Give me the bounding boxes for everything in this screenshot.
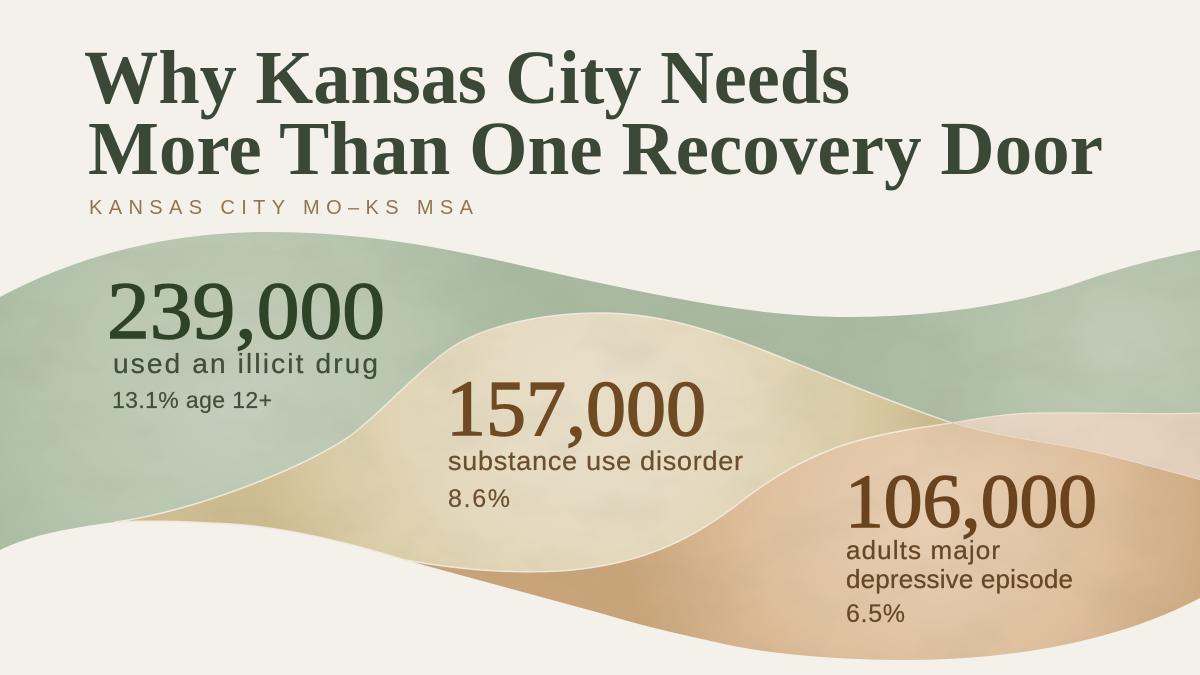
band: substance use disorder (beige) <box>115 313 952 572</box>
label: adults major <box>846 535 1000 565</box>
band: depressive episode (tan) <box>405 423 1200 660</box>
label: used an illicit drug <box>113 348 378 379</box>
watercolor texture <box>625 353 956 426</box>
percentage: 8.6% <box>448 485 510 513</box>
title: More Than One Recovery Door <box>88 107 1103 191</box>
stat: 106,000 <box>845 460 1097 628</box>
band: pale overlap on right <box>952 413 1200 481</box>
title: Why Kansas City Needs <box>84 36 850 120</box>
percentage: 13.1% age 12+ <box>112 387 272 413</box>
label: substance use disorder <box>448 446 743 476</box>
number: 239,000 <box>107 265 385 356</box>
stat: 239,000 <box>107 265 385 413</box>
band: illicit drug use (green) <box>0 232 1200 550</box>
stat: 157,000 <box>446 366 743 513</box>
number: 157,000 <box>446 366 706 453</box>
label <box>846 535 1073 594</box>
title <box>84 36 1103 191</box>
subtitle: KANSAS CITY MO–KS MSA <box>89 197 474 219</box>
number: 106,000 <box>845 460 1097 544</box>
percentage: 6.5% <box>846 600 905 628</box>
label: depressive episode <box>846 564 1073 594</box>
